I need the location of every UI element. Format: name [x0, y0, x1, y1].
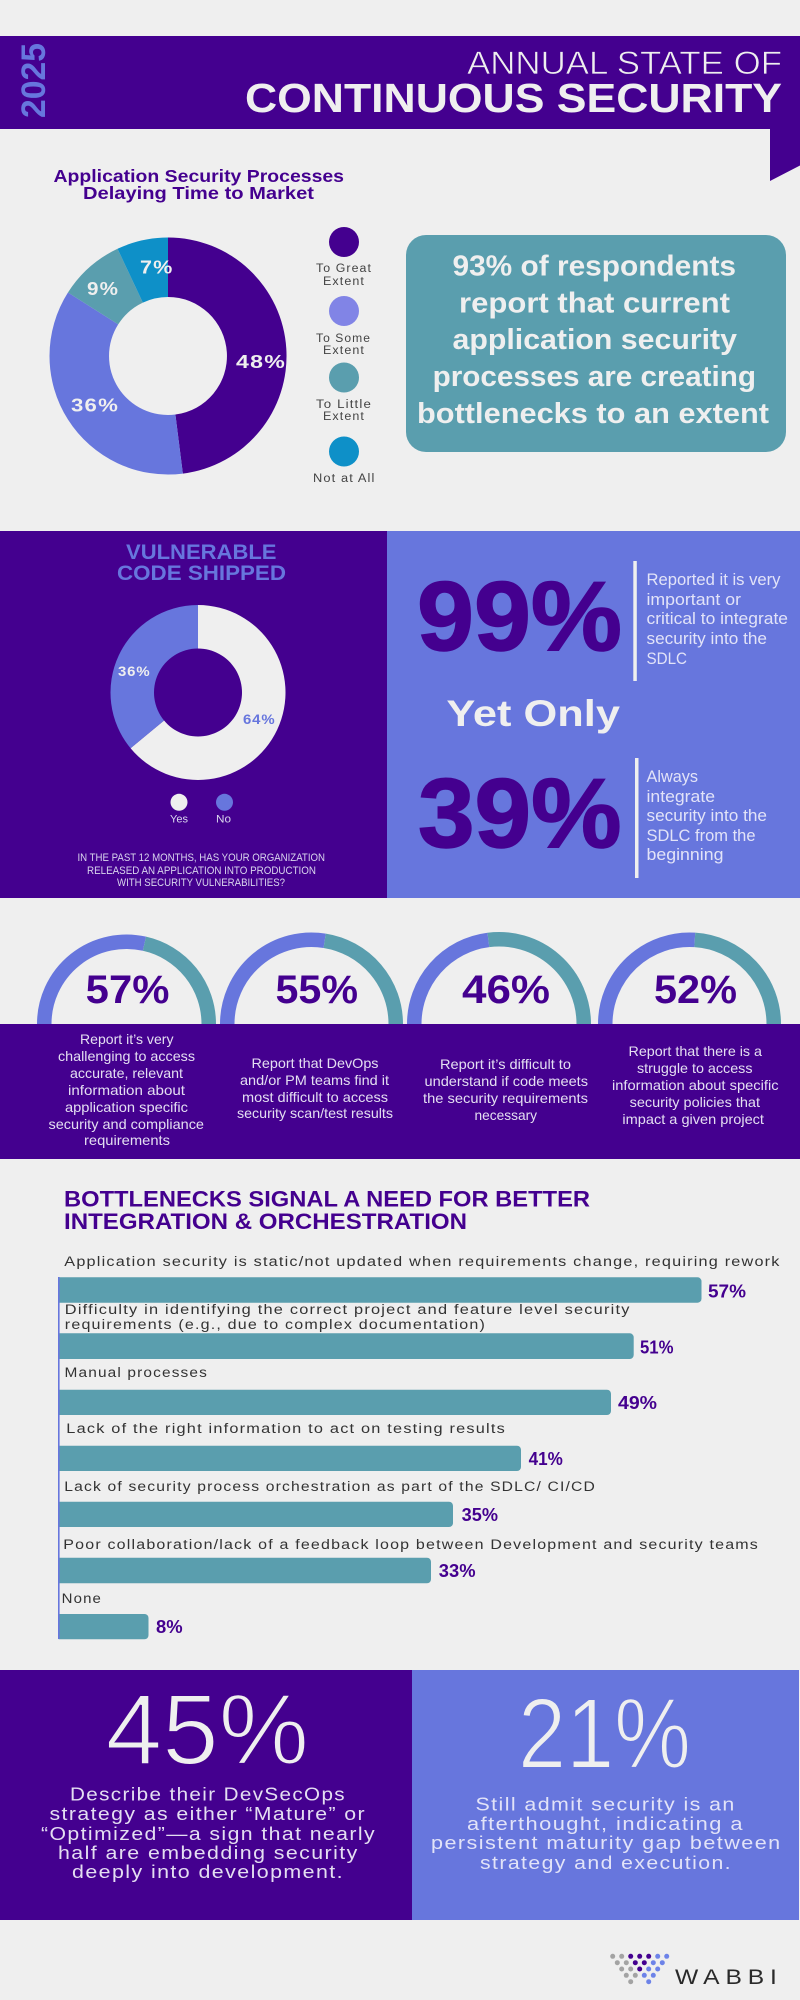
- yet only: Yet Only: [446, 693, 620, 734]
- text: 21%: Still admit security is an: [476, 1795, 736, 1815]
- header banner: [0, 36, 800, 181]
- text: 21%: persistent maturity gap between: [431, 1833, 782, 1853]
- heading: processes delaying time to market: Application Security Processes: [54, 166, 344, 186]
- divider and text: 39%: [635, 758, 767, 878]
- bar: difficulty identifying requirements: [59, 1302, 673, 1359]
- divider and text: 99%: Reported it is very: [646, 571, 781, 589]
- panel: 21% afterthought: [412, 1670, 799, 1920]
- text: 57%: challenging to access: [58, 1048, 195, 1064]
- bar: lack of orchestration: [59, 1479, 596, 1527]
- text: 57%: requirements: [84, 1132, 170, 1148]
- bar: lack of information: Lack of the right information to act on testing results: [66, 1421, 506, 1436]
- divider and text: 39%: SDLC from the: [646, 827, 756, 845]
- panel: 45% mature: [0, 1670, 412, 1920]
- text: 55%: Report that DevOps: [252, 1055, 378, 1071]
- bar: none: 8%: [156, 1617, 183, 1637]
- divider and text: 39%: Always: [646, 768, 698, 786]
- gauge: 46%: 46%: [462, 968, 550, 1012]
- divider and text: 39%: beginning: [646, 846, 724, 864]
- bar: none: [59, 1591, 183, 1639]
- stat: 45%: 45%: [106, 1674, 309, 1786]
- heading: processes delaying time to market: Delaying Time to Market: [83, 183, 314, 203]
- legend: extent: Extent: [323, 411, 365, 423]
- donut chart: time to market: 36%: [71, 394, 119, 416]
- stat: 99%: 99%: [417, 561, 622, 671]
- bar: static security: [59, 1254, 781, 1303]
- text: 46%: necessary: [474, 1107, 537, 1123]
- gauge: 57%: 57%: [86, 968, 169, 1012]
- text: 45%: half are embedding security: [58, 1843, 359, 1863]
- legend: yes and no: No: [216, 814, 231, 826]
- text: 57%: information about: [68, 1082, 185, 1098]
- text: 45%: strategy as either “Mature” or: [50, 1804, 366, 1824]
- bar: difficulty identifying requirements: requirements (e.g., due to complex documentation): [65, 1317, 486, 1332]
- year label: 2025: [15, 43, 53, 118]
- legend: extent: [313, 227, 376, 485]
- divider and text: 39%: security into the: [646, 807, 767, 825]
- bar: poor collaboration: [59, 1537, 759, 1583]
- heading: bottlenecks: BOTTLENECKS SIGNAL A NEED FOR BETTER: [64, 1187, 590, 1212]
- legend: extent: To Great: [316, 263, 372, 275]
- bar: lack of orchestration: 35%: [462, 1505, 498, 1525]
- gauge: 57%: [44, 942, 209, 1024]
- bar: lack of orchestration: Lack of security process orchestration as part of the SDLC/ CI/CD: [64, 1479, 596, 1494]
- panel heading: VULNERABLE: [126, 540, 276, 564]
- logo: wabbi: [610, 1954, 783, 1989]
- text: 52%: impact a given project: [622, 1111, 764, 1127]
- bar: none: None: [62, 1591, 102, 1606]
- text: 57%: [48, 1031, 204, 1148]
- survey question: IN THE PAST 12 MONTHS, HAS YOUR ORGANIZATION: [78, 852, 325, 864]
- bar: difficulty identifying requirements: 51%: [640, 1337, 674, 1357]
- callout: 93% of respondents: report that current: [459, 288, 730, 320]
- text: 21%: strategy and execution.: [480, 1853, 732, 1873]
- donut chart: vulnerable code: [111, 605, 286, 780]
- text: 55%: most difficult to access: [242, 1089, 388, 1105]
- text: 57%: accurate, relevant: [70, 1065, 183, 1081]
- bar: manual processes: Manual processes: [64, 1365, 208, 1380]
- text: 46%: the security requirements: [423, 1090, 588, 1106]
- text: 45%: [41, 1785, 376, 1882]
- survey question: [78, 852, 325, 889]
- bar chart: bottlenecks: [58, 1254, 781, 1639]
- text: 52%: [612, 1043, 779, 1127]
- title: ANNUAL STATE OF: [467, 45, 782, 81]
- gauge: 55%: 55%: [276, 968, 358, 1012]
- callout: 93% of respondents: application security: [452, 324, 737, 356]
- text: 45%: “Optimized”—a sign that nearly: [41, 1824, 376, 1844]
- title: CONTINUOUS SECURITY: [245, 75, 782, 121]
- callout: 93% of respondents: [406, 235, 786, 452]
- gauge: 46%: [414, 939, 584, 1024]
- bar: lack of information: 41%: [529, 1449, 563, 1469]
- text: 55%: [237, 1055, 393, 1121]
- donut chart: time to market: 7%: [140, 257, 174, 278]
- survey question: WITH SECURITY VULNERABILITIES?: [117, 877, 285, 889]
- text: 57%: application specific: [65, 1099, 188, 1115]
- text: 55%: security scan/test results: [237, 1105, 393, 1121]
- divider and text: 99%: important or: [646, 591, 742, 609]
- heading: bottlenecks: [64, 1187, 590, 1234]
- callout: 93% of respondents: bottlenecks to an extent: [417, 398, 769, 430]
- donut chart: vulnerable code: 36%: [118, 664, 150, 679]
- divider and text: 99%: critical to integrate: [646, 610, 788, 628]
- text: 21%: [431, 1795, 782, 1873]
- panel: 99% yet only 39%: [387, 531, 800, 898]
- panel heading: [117, 540, 286, 585]
- text: 45%: deeply into development.: [72, 1862, 344, 1882]
- divider and text: 99%: SDLC: [646, 650, 687, 668]
- text: 45%: Describe their DevSecOps: [70, 1785, 346, 1805]
- donut chart: time to market: 48%: [236, 351, 286, 372]
- legend: extent: To Some: [316, 333, 371, 345]
- legend: yes and no: Yes: [170, 814, 188, 826]
- donut chart: time to market: [50, 237, 287, 475]
- divider and text: 99%: [633, 561, 788, 681]
- gauge: 52%: [605, 940, 774, 1024]
- gauge: 52%: 52%: [654, 968, 737, 1012]
- survey question: RELEASED AN APPLICATION INTO PRODUCTION: [87, 865, 316, 877]
- divider and text: 99%: security into the: [646, 630, 767, 648]
- heading: processes delaying time to market: [54, 166, 344, 203]
- panel: access challenges band: [0, 1024, 800, 1159]
- legend: extent: Extent: [323, 345, 365, 357]
- text: 46%: understand if code meets: [424, 1073, 588, 1089]
- legend: extent: Not at All: [313, 473, 376, 485]
- chart axis: [58, 1277, 60, 1639]
- bar: lack of information: [59, 1421, 563, 1471]
- text: 57%: Report it’s very: [80, 1031, 174, 1047]
- legend: extent: To Little: [316, 399, 372, 411]
- donut chart: vulnerable code: 64%: [243, 712, 276, 727]
- stat: 21%: 21%: [518, 1678, 691, 1790]
- bar: poor collaboration: Poor collaboration/lack of a feedback loop between Development and security teams: [63, 1537, 759, 1552]
- logo: wabbi: WABBI: [675, 1966, 783, 1989]
- text: 55%: and/or PM teams find it: [240, 1072, 389, 1088]
- stat: 39%: 39%: [418, 758, 622, 868]
- bar: poor collaboration: 33%: [439, 1561, 476, 1581]
- text: 52%: Report that there is a: [628, 1043, 762, 1059]
- callout: 93% of respondents: processes are creating: [433, 361, 756, 393]
- callout: 93% of respondents: 93% of respondents: [452, 250, 736, 282]
- text: 52%: security policies that: [630, 1094, 760, 1110]
- donut chart: time to market: 9%: [87, 278, 119, 299]
- heading: bottlenecks: INTEGRATION & ORCHESTRATION: [64, 1209, 467, 1234]
- divider and text: 39%: integrate: [646, 788, 715, 806]
- bar: difficulty identifying requirements: Difficulty in identifying the correct project and feature level security: [65, 1302, 631, 1317]
- bar: manual processes: 49%: [618, 1393, 657, 1413]
- bar: static security: 57%: [708, 1281, 746, 1301]
- text: 21%: afterthought, indicating a: [467, 1814, 744, 1834]
- text: 52%: information about specific: [612, 1077, 779, 1093]
- panel heading: CODE SHIPPED: [117, 561, 286, 585]
- text: 46%: [423, 1056, 588, 1123]
- bar: manual processes: [59, 1365, 657, 1415]
- legend: extent: Extent: [323, 276, 365, 288]
- text: 46%: Report it’s difficult to: [440, 1056, 571, 1072]
- panel: vulnerable code shipped: [0, 531, 387, 898]
- bar: static security: Application security is static/not updated when requirements change, requiring rework: [64, 1254, 781, 1269]
- title: [245, 45, 782, 121]
- gauge: 55%: [227, 940, 396, 1024]
- text: 52%: struggle to access: [637, 1060, 752, 1076]
- text: 57%: security and compliance: [48, 1116, 204, 1132]
- legend: yes and no: [170, 794, 233, 826]
